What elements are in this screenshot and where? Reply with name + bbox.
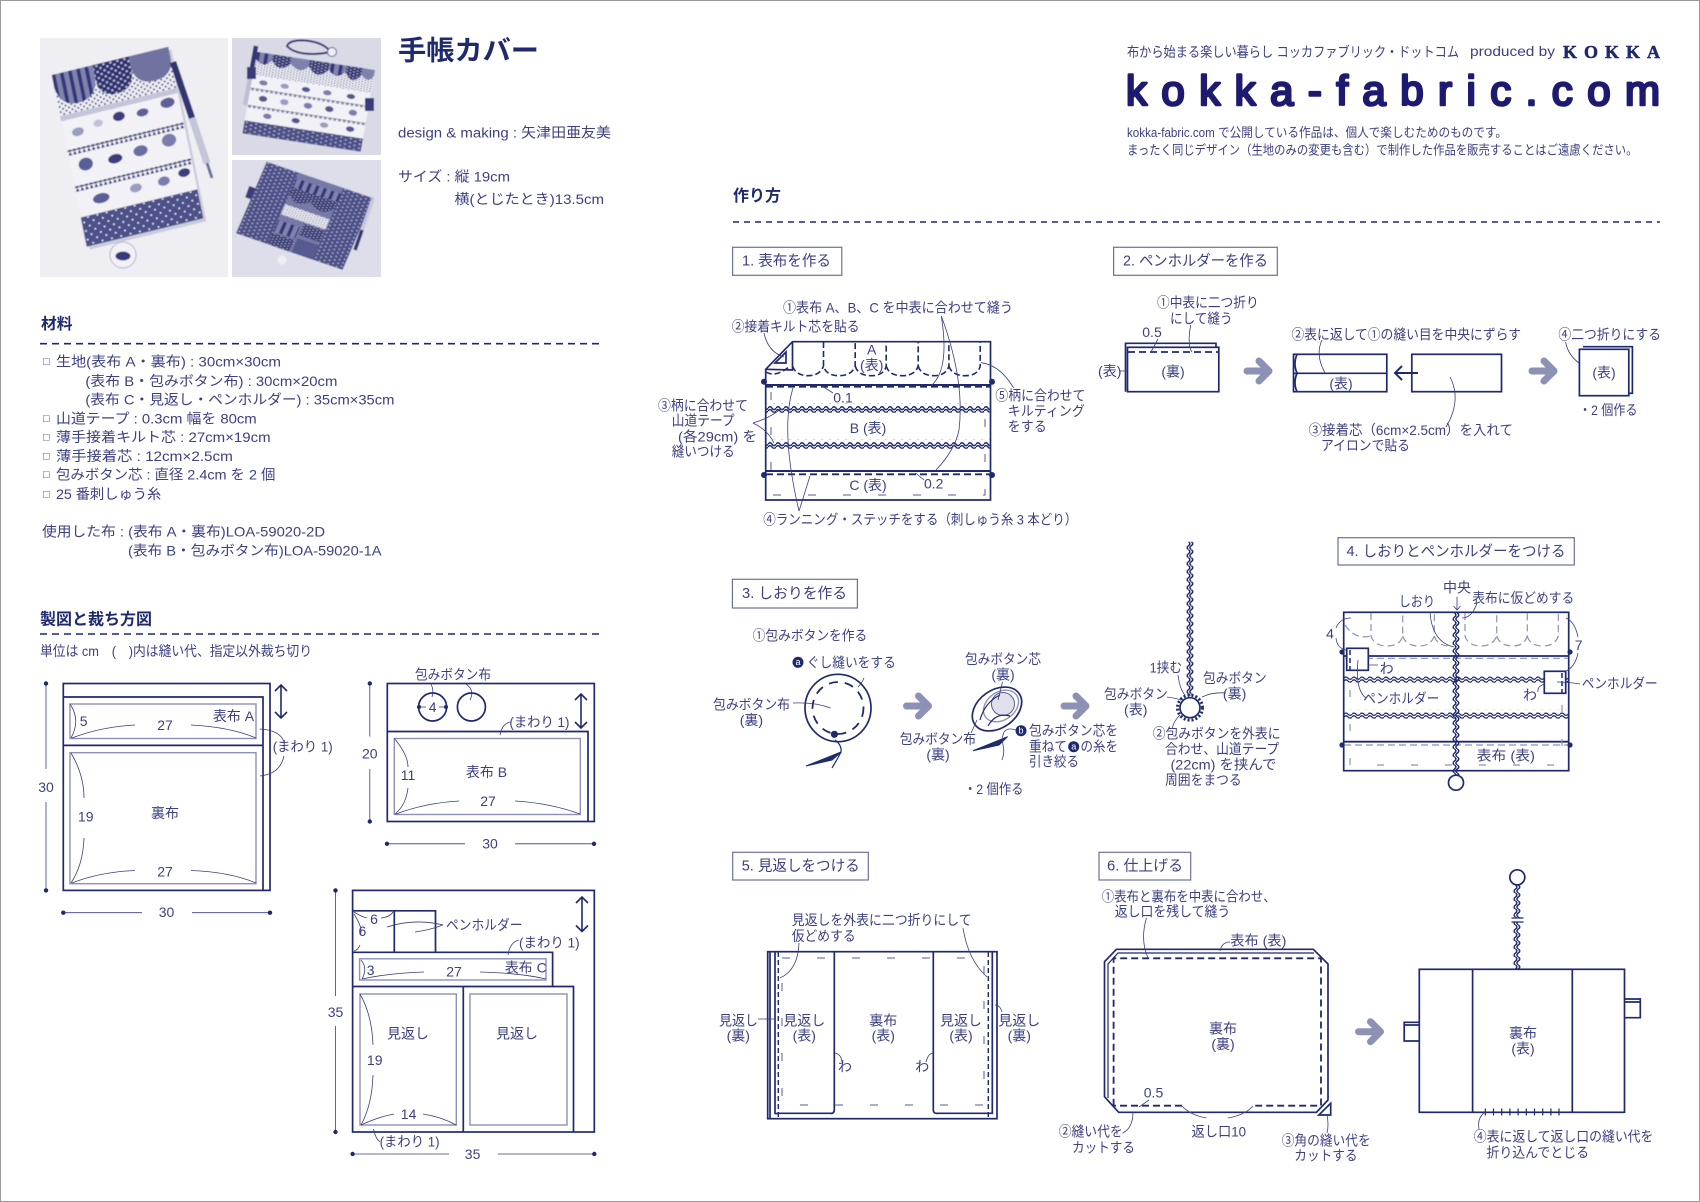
tagline: 布から始まる楽しい暮らし コッカファブリック・ドットコム <box>1127 44 1459 60</box>
step 6 heading: 6. 仕上げる <box>1107 858 1183 874</box>
panel: step 2 <box>1098 247 1661 454</box>
diagram: running stitch circle: ぐし縫いをする <box>807 654 896 670</box>
materials list: 山道テープ : 0.3cm 幅を 80cm <box>56 410 257 426</box>
materials list <box>43 354 394 502</box>
units note: 単位は cm ( )内は縫い代、指定以外裁ち切り <box>40 643 312 659</box>
diagram: folded pen holder: ④二つ折りにする <box>1558 326 1661 342</box>
layout: 35x35 fabric: 19 <box>367 1052 383 1068</box>
step 1 callouts: 山道テープ <box>672 413 735 429</box>
step 1 callouts: ③柄に合わせて <box>658 398 748 414</box>
diagram: gathering around core: 包みボタン芯 <box>965 651 1041 667</box>
materials list: □ <box>43 469 50 481</box>
step 1 heading <box>733 247 842 275</box>
diagram: folded strip: (表) <box>1098 363 1121 379</box>
panel: step 5 <box>719 852 1040 1119</box>
usage notice <box>1127 125 1638 158</box>
diagram: attach bookmark and holders: しおり <box>1399 593 1435 609</box>
diagram: attach facings: 仮どめする <box>792 928 856 944</box>
diagram: folded pen holder <box>1558 326 1661 418</box>
diagram: gathering around core: (裏) <box>926 746 950 762</box>
step 4 heading <box>1338 538 1574 565</box>
materials list: 生地(表布 A・裏布) : 30cm×30cm <box>56 354 281 370</box>
diagram: finished cover: 折り込んでとじる <box>1486 1145 1589 1161</box>
panel: step 1 <box>658 247 1085 527</box>
diagram: attach facings: わ <box>915 1059 929 1075</box>
layout: 30x20 fabric: 表布 B <box>466 764 507 780</box>
photo: back open <box>232 160 381 277</box>
step 1 callouts: ④ランニング・ステッチをする（刺しゅう糸 3 本どり） <box>763 511 1077 527</box>
diagram: gathering around core: b <box>1018 725 1024 735</box>
header: brand block <box>1126 42 1660 158</box>
layout: 35x35 fabric: 14 <box>401 1106 417 1122</box>
layout: 30x20 fabric: 包みボタン布 <box>415 667 491 683</box>
diagram: folded strip: ①中表に二つ折り <box>1157 295 1259 311</box>
diagram: gathering around core: の糸を <box>1080 739 1118 755</box>
usage notice: kokka-fabric.com で公開している作品は、個人で楽しむためのものです。 <box>1127 125 1507 140</box>
diagram: attach facings <box>719 912 1040 1119</box>
step 1 callouts <box>658 299 1085 527</box>
layout: 30x30 fabric: 裏布 <box>151 805 179 821</box>
diagram: folded pen holder: (表) <box>1592 364 1616 380</box>
panel: cutting layouts <box>38 610 604 1162</box>
designer credit: design & making : 矢津田亜友美 <box>398 125 611 141</box>
layout: 30x30 fabric <box>38 681 333 920</box>
diagram: outer fabric: (表) <box>860 357 883 373</box>
diagram: outer fabric: 0.2 <box>924 475 944 491</box>
diagram: button with tape: 包みボタン <box>1203 670 1267 686</box>
diagram: attach facings: (表) <box>949 1028 973 1044</box>
fabrics used: 使用した布 : (表布 A・裏布)LOA-59020-2D <box>42 523 325 539</box>
step 1 heading: 1. 表布を作る <box>742 252 831 270</box>
layout: 30x30 fabric: 30 <box>159 904 174 920</box>
diagram: attach facings: (裏) <box>1008 1028 1031 1044</box>
diagram: turned strip with interfacing <box>1292 326 1521 454</box>
step 4 heading: 4. しおりとペンホルダーをつける <box>1346 543 1566 560</box>
layout: 35x35 fabric <box>328 888 596 1162</box>
step 2 heading <box>1114 247 1277 275</box>
diagram: finished cover: ④表に返して返し口の縫い代を <box>1474 1129 1653 1145</box>
diagram: attach bookmark and holders: 7 <box>1575 637 1583 653</box>
layout: 35x35 fabric: 見返し <box>387 1026 429 1042</box>
diagram: button with tape: 周囲をまつる <box>1165 772 1242 788</box>
arrow <box>906 696 928 716</box>
photo: front open <box>232 38 381 155</box>
diagram: attach facings: 見返し <box>940 1012 982 1028</box>
diagram: attach facings: わ <box>838 1059 852 1075</box>
diagram: sew cover and lining: 表布 (表) <box>1230 933 1286 949</box>
step 6 heading <box>1099 852 1191 880</box>
diagram: attach bookmark and holders: 4 <box>1326 625 1334 641</box>
diagram: attach bookmark and holders: わ <box>1523 687 1537 703</box>
diagram: gathering around core: ・2 個作る <box>964 781 1023 797</box>
layout: 35x35 fabric: 35 <box>465 1146 481 1162</box>
diagram: gathering around core <box>900 651 1118 797</box>
heading: how to make: 作り方 <box>733 186 781 205</box>
materials list: □ <box>43 356 50 368</box>
diagram: outer fabric: A <box>867 341 877 357</box>
diagram: attach bookmark and holders: ペンホルダー <box>1363 690 1439 706</box>
size info: 横(とじたとき)13.5cm <box>454 191 604 207</box>
layout: 35x35 fabric: ペンホルダー <box>446 917 522 933</box>
photo: main cover <box>40 38 228 277</box>
diagram: button with tape: (裏) <box>1223 685 1246 701</box>
panel: step 3 <box>713 542 1280 797</box>
diagram: outer fabric <box>753 316 1014 511</box>
diagram: finished cover <box>1404 870 1653 1161</box>
produced by: produced by <box>1470 43 1555 59</box>
step 2 heading: 2. ペンホルダーを作る <box>1123 252 1268 270</box>
diagram: folded strip <box>1098 295 1259 392</box>
diagram: gathering around core: 重ねて <box>1029 739 1067 755</box>
layout: 35x35 fabric: 表布 C <box>505 959 547 975</box>
diagram: turned strip with interfacing: ②表に返して①の縫い目を中央にずらす <box>1292 326 1521 342</box>
arrow <box>1358 1022 1380 1042</box>
layout: 35x35 fabric: 見返し <box>496 1026 538 1042</box>
materials list: (表布 C・見返し・ペンホルダー) : 35cm×35cm <box>85 392 394 408</box>
diagram: button with tape: ②包みボタンを外表に <box>1153 726 1280 742</box>
diagram: attach facings: 裏布 <box>869 1012 897 1028</box>
step 1 callouts: ②接着キルト芯を貼る <box>732 319 860 335</box>
diagram: attach bookmark and holders: 表布に仮どめする <box>1472 590 1574 606</box>
usage notice: まったく同じデザイン（生地のみの変更も含む）で制作した作品を販売することはご遠慮ください。 <box>1127 142 1638 158</box>
layout: 35x35 fabric: (まわり 1) <box>519 935 580 951</box>
materials list: 薄手接着キルト芯 : 27cm×19cm <box>56 429 271 445</box>
fabrics used <box>42 523 382 559</box>
diagram: attach bookmark and holders: 中央 <box>1443 579 1471 595</box>
layout: 35x35 fabric: 27 <box>446 964 462 980</box>
materials list: 薄手接着芯 : 12cm×2.5cm <box>56 448 233 464</box>
diagram: finished cover: 裏布 <box>1509 1025 1537 1041</box>
diagram: gathering around core: a <box>1071 741 1076 751</box>
diagram: running stitch circle: 包みボタン布 <box>713 696 790 712</box>
diagram: sew cover and lining: ③角の縫い代を <box>1282 1132 1371 1148</box>
panel: step 4 <box>1326 538 1658 790</box>
layout: 30x20 fabric: 4 <box>429 699 437 715</box>
diagram: running stitch circle: a <box>795 657 801 667</box>
diagram: folded strip: にして縫う <box>1170 310 1233 326</box>
diagram: button with tape: 1挟む <box>1150 659 1182 675</box>
diagram: attach facings: 見返し <box>719 1012 758 1028</box>
layout: 30x20 fabric: (まわり 1) <box>509 714 569 730</box>
diagram: button with tape: (22cm) を挟んで <box>1170 756 1276 772</box>
diagram: attach facings: (表) <box>793 1028 816 1044</box>
diagram: outer fabric: C (表) <box>849 477 887 493</box>
diagram: attach bookmark and holders: 表布 (表) <box>1477 747 1535 763</box>
arrow <box>1064 696 1086 716</box>
layout: 30x20 fabric: 27 <box>480 793 496 809</box>
diagram: sew cover and lining: 裏布 <box>1209 1021 1237 1037</box>
title: 手帳カバー <box>398 36 539 66</box>
diagram: gathering around core: 包みボタン布 <box>900 731 976 747</box>
panel: step 6 <box>1059 852 1653 1164</box>
diagram: outer fabric: B (表) <box>850 420 886 436</box>
size info <box>398 169 604 207</box>
layout: 30x30 fabric: 30 <box>38 779 54 795</box>
step 1 callouts: ⑤柄に合わせて <box>995 388 1085 404</box>
diagram: attach facings: (表) <box>872 1028 895 1044</box>
step 3 heading: 3. しおりを作る <box>742 585 847 602</box>
diagram: sew cover and lining: 返し口を残して縫う <box>1115 904 1230 920</box>
heading: pattern and cutting: 製図と裁ち方図 <box>40 610 152 628</box>
step 5 heading <box>733 852 868 880</box>
diagram: running stitch circle <box>713 628 896 768</box>
diagram: turned strip with interfacing: ③接着芯（6cm×2.5cm）を入れて <box>1308 422 1513 438</box>
diagram: button with tape <box>1104 542 1280 788</box>
diagram: attach facings: (裏) <box>727 1028 750 1044</box>
diagram: attach facings: 見返し <box>998 1012 1040 1028</box>
diagram: gathering around core: 包みボタン芯を <box>1029 723 1118 739</box>
layout: 30x20 fabric: 30 <box>482 836 498 852</box>
layout: 30x20 fabric <box>362 667 596 852</box>
logo: kokka-fabric.com: kokka-fabric.com <box>1126 67 1660 114</box>
materials list: □ <box>43 488 50 500</box>
step 3 heading <box>732 579 857 608</box>
layout: 30x20 fabric: 20 <box>362 746 378 762</box>
diagram: sew cover and lining: 0.5 <box>1144 1085 1163 1101</box>
step 5 heading: 5. 見返しをつける <box>742 858 860 874</box>
step 1 callouts: をする <box>1008 419 1047 435</box>
layout: 30x20 fabric: 11 <box>401 767 415 783</box>
diagram: sew cover and lining: カットする <box>1294 1148 1358 1164</box>
materials list: □ <box>43 431 50 443</box>
diagram: sew cover and lining <box>1059 889 1371 1164</box>
diagram: button with tape: (表) <box>1124 701 1147 717</box>
diagram: sew cover and lining: ①表布と裏布を中表に合わせ、 <box>1102 889 1276 905</box>
diagram: sew cover and lining: カットする <box>1072 1139 1135 1155</box>
layout: 30x30 fabric: 27 <box>157 864 173 880</box>
layout: 30x30 fabric: 27 <box>157 717 173 733</box>
diagram: button with tape: 包みボタン <box>1104 686 1168 702</box>
layout: 35x35 fabric: 6 <box>359 923 367 939</box>
arrow <box>1532 361 1554 381</box>
materials list: □ <box>43 450 50 462</box>
diagram: attach bookmark and holders: ペンホルダー <box>1582 676 1658 692</box>
diagram: gathering around core: (裏) <box>991 666 1015 682</box>
diagram: sew cover and lining: ②縫い代を <box>1059 1124 1123 1140</box>
fabrics used: (表布 B・包みボタン布)LOA-59020-1A <box>128 543 382 559</box>
layout: 30x30 fabric: 19 <box>78 808 94 824</box>
diagram: attach facings: 見返し <box>783 1012 825 1028</box>
panel: materials <box>40 314 604 559</box>
KOKKA wordmark: KOKKA <box>1563 42 1660 62</box>
diagram: gathering around core: 引き絞る <box>1029 754 1079 770</box>
layout: 30x30 fabric: 表布 A <box>213 708 255 724</box>
size info: サイズ : 縦 19cm <box>398 169 510 185</box>
step 1 callouts: ①表布 A、B、C を中表に合わせて縫う <box>783 299 1013 315</box>
diagram: running stitch circle: ①包みボタンを作る <box>753 628 867 644</box>
step 1 callouts: 縫いつける <box>672 444 735 460</box>
layout: 30x30 fabric: 5 <box>80 713 88 729</box>
diagram: attach bookmark and holders <box>1326 579 1658 790</box>
diagram: folded pen holder: ・2 個作る <box>1579 402 1638 418</box>
diagram: outer fabric: 0.1 <box>833 390 853 406</box>
heading: materials: 材料 <box>41 314 73 333</box>
materials list: 25 番刺しゅう糸 <box>56 486 161 502</box>
diagram: turned strip with interfacing: アイロンで貼る <box>1321 438 1410 454</box>
layout: 35x35 fabric: 35 <box>328 1004 343 1020</box>
layout: 30x30 fabric: (まわり 1) <box>273 738 333 754</box>
materials list: □ <box>43 413 50 425</box>
diagram: turned strip with interfacing: (表) <box>1329 375 1353 391</box>
layout: 35x35 fabric: 3 <box>367 962 375 978</box>
diagram: sew cover and lining: (裏) <box>1211 1036 1235 1052</box>
layout: 35x35 fabric: 6 <box>370 911 378 927</box>
diagram: sew cover and lining: 返し口10 <box>1192 1123 1246 1139</box>
step 1 callouts: (各29cm) を <box>678 429 757 445</box>
diagram: running stitch circle: (裏) <box>740 712 763 728</box>
materials list: 包みボタン芯 : 直径 2.4cm を 2 個 <box>56 467 275 483</box>
step 1 callouts: キルティング <box>1008 403 1085 419</box>
diagram: button with tape: 合わせ、山道テープ <box>1165 741 1279 757</box>
diagram: attach facings: 見返しを外表に二つ折りにして <box>792 912 972 928</box>
diagram: folded strip: (裏) <box>1161 364 1185 380</box>
layout: 35x35 fabric: (まわり 1) <box>380 1134 440 1150</box>
materials list: (表布 B・包みボタン布) : 30cm×20cm <box>85 373 337 389</box>
diagram: finished cover: (表) <box>1511 1040 1535 1056</box>
diagram: folded strip: 0.5 <box>1142 324 1162 340</box>
arrow <box>1247 361 1269 381</box>
diagram: attach bookmark and holders: わ <box>1380 660 1394 676</box>
